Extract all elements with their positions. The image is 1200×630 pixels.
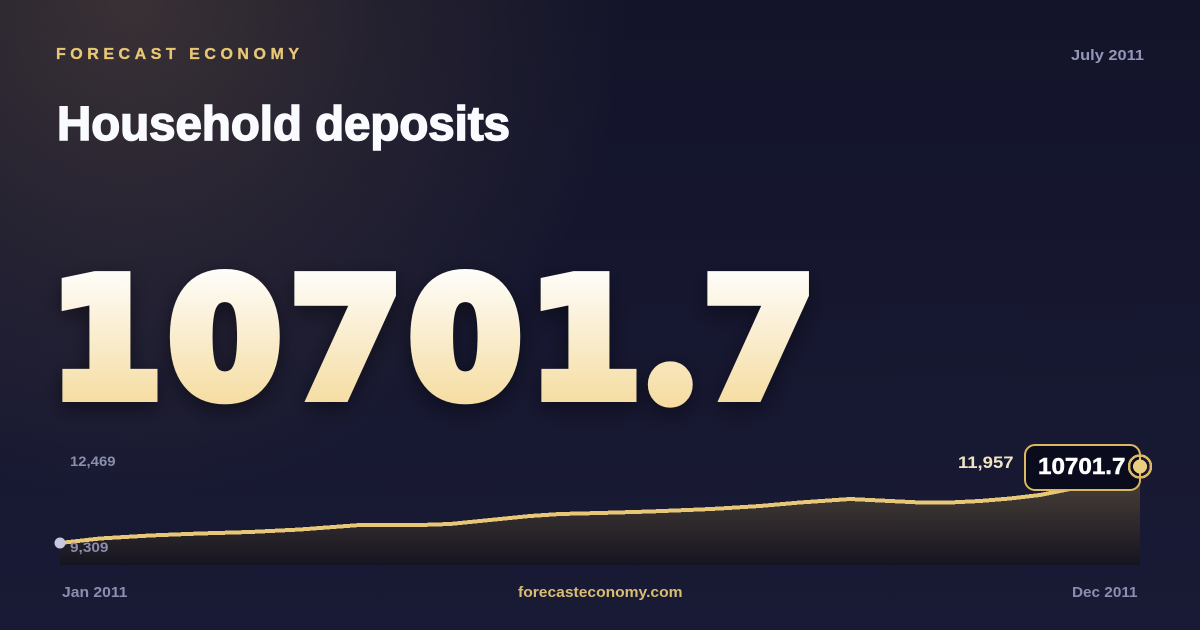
headline value: 1 [528,246,642,435]
high value label: 11,957 [958,453,1014,472]
axis minimum label: 9,309 [70,539,109,555]
chart line [60,466,1140,543]
headline value: 1 [49,246,163,435]
headline value: 0 [168,246,282,435]
chart area fill [60,466,1140,565]
headline value: . [643,220,697,444]
date label: July 2011 [1071,47,1144,64]
headline value: 7 [290,246,403,435]
end point marker [1129,456,1151,478]
source website: forecasteconomy.com [518,584,682,601]
x-axis start label: Jan 2011 [62,584,128,601]
start point marker [54,538,66,548]
latest value badge [1025,445,1140,490]
latest value badge: 10701.7 [1038,453,1126,479]
eyebrow: brand name: FORECAST ECONOMY [56,46,299,63]
headline value: 0 [409,246,522,435]
chart: household deposits trend [54,445,1151,565]
axis maximum label: 12,469 [70,453,116,469]
headline value: 7 [702,246,816,435]
title: Household deposits [57,98,510,151]
x-axis end label: Dec 2011 [1072,584,1138,601]
